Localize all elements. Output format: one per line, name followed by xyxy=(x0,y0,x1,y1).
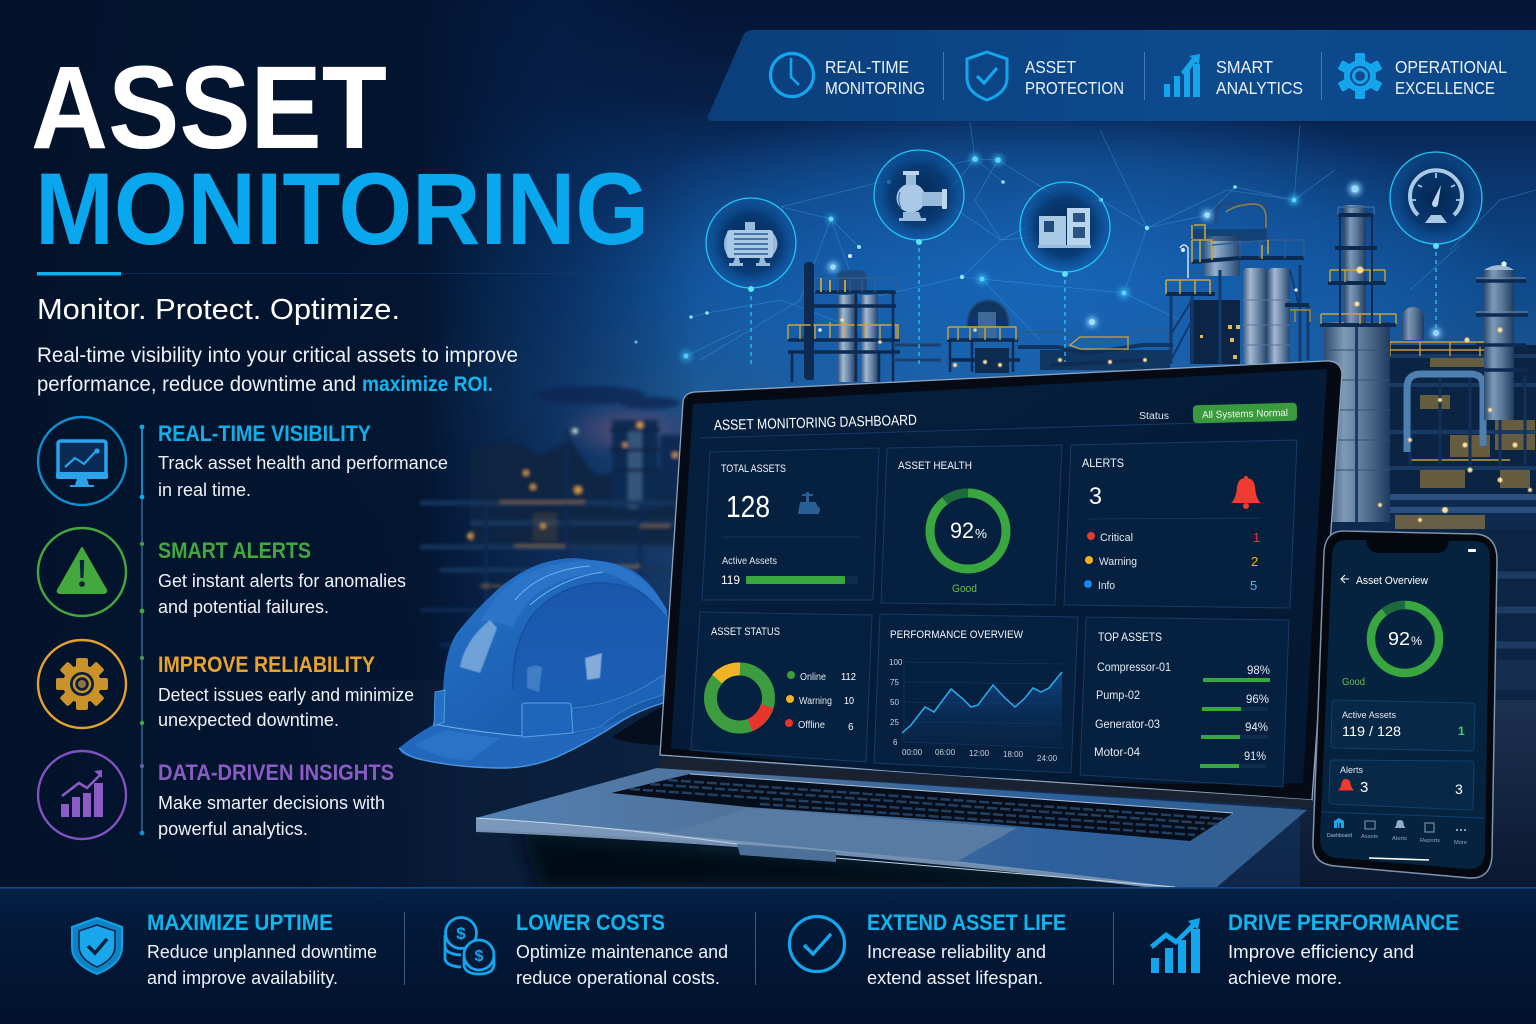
donut chart xyxy=(710,669,768,727)
icon: monitor with trend xyxy=(38,417,126,505)
icon bubble: generator xyxy=(1020,182,1110,362)
panel: alerts: ALERTS xyxy=(1082,458,1124,470)
small dome xyxy=(1402,307,1424,340)
line chart xyxy=(889,658,1063,763)
benefit: extend asset life: EXTEND ASSET LIFE xyxy=(867,910,1066,935)
column pair xyxy=(1243,268,1267,364)
panel: asset status: Online xyxy=(800,672,826,683)
panel: performance overview: PERFORMANCE OVERVIEW xyxy=(890,629,1024,641)
panel: alerts: Warning xyxy=(1099,556,1137,568)
top banner xyxy=(708,30,1536,121)
feature: data-driven insights: DATA-DRIVEN INSIGHTS xyxy=(158,760,394,785)
phone xyxy=(1313,531,1497,878)
feature: data-driven insights: Make smarter decisions with xyxy=(158,792,385,813)
feature: real-time visibility: REAL-TIME VISIBILITY xyxy=(158,421,371,446)
feature: smart alerts: Get instant alerts for anomalies xyxy=(158,570,406,591)
panel: asset status: Warning xyxy=(799,696,832,707)
label: real-time monitoring: REAL-TIME xyxy=(825,57,909,77)
status pill: All Systems Normal xyxy=(1202,408,1288,421)
panel: alerts xyxy=(1064,440,1297,608)
panel: top assets: 98% xyxy=(1247,665,1270,677)
icon: growth chart xyxy=(1150,918,1200,973)
label: real-time monitoring xyxy=(825,57,925,98)
benefit: extend asset life: Increase reliability and xyxy=(867,941,1046,962)
refinery: tower C xyxy=(1166,204,1310,364)
line chart: 24:00 xyxy=(1037,754,1058,763)
warm windows xyxy=(1395,355,1535,529)
large pipe arc xyxy=(1407,374,1483,452)
panel: asset status: Offline xyxy=(798,720,825,731)
ridge xyxy=(480,560,667,627)
intro paragraph: Real-time visibility into your critical assets to improve xyxy=(37,344,518,367)
feature: improve reliability: Detect issues early and minimize xyxy=(158,684,414,705)
panel: top assets: 94% xyxy=(1245,722,1268,734)
panel: total assets: Active Assets xyxy=(722,556,777,567)
benefit: drive performance: Improve efficiency and xyxy=(1228,941,1414,962)
icon: valve xyxy=(798,492,820,514)
panel: asset health: % xyxy=(975,526,987,541)
benefit: maximize uptime: Reduce unplanned downtime xyxy=(147,941,377,962)
label: real-time monitoring: MONITORING xyxy=(825,78,925,98)
feature: data-driven insights xyxy=(38,751,394,839)
benefit: maximize uptime: MAXIMIZE UPTIME xyxy=(147,910,333,935)
status pill xyxy=(1193,403,1297,423)
highlights xyxy=(460,620,497,673)
buckle xyxy=(522,703,573,737)
title: ASSET xyxy=(31,42,387,174)
title: MONITORING xyxy=(35,152,649,266)
panel: asset health: ASSET HEALTH xyxy=(898,460,972,472)
panel: asset status: 112 xyxy=(841,672,856,683)
icon bubble: pump xyxy=(874,150,964,365)
panel: total assets xyxy=(702,448,879,600)
feature: smart alerts: SMART ALERTS xyxy=(158,538,311,563)
panel: alerts: Info xyxy=(1098,580,1115,592)
dashboard title: ASSET MONITORING DASHBOARD xyxy=(714,413,917,434)
benefit: lower costs: Optimize maintenance and xyxy=(516,941,728,962)
panel: asset health: 92 xyxy=(950,518,974,543)
label: operational excellence: EXCELLENCE xyxy=(1395,78,1495,98)
icon: bars with trend xyxy=(38,751,126,839)
strap xyxy=(572,675,663,733)
panel: asset health xyxy=(881,445,1062,605)
bottom benefits band xyxy=(0,887,1536,1024)
panel: alerts: 2 xyxy=(1251,554,1258,569)
side clip xyxy=(434,690,445,726)
benefit: lower costs: LOWER COSTS xyxy=(516,910,665,935)
laptop deck xyxy=(476,768,1307,890)
panel: top assets: 96% xyxy=(1246,694,1269,706)
line chart: 06:00 xyxy=(935,748,956,757)
dome panel xyxy=(513,583,668,704)
benefit: drive performance xyxy=(1150,910,1459,988)
pipe bridge xyxy=(893,345,941,360)
icon: check circle xyxy=(790,916,844,972)
panel: asset status xyxy=(691,612,872,762)
line chart: 50 xyxy=(890,698,899,707)
label: asset protection xyxy=(1025,57,1124,98)
phone screen xyxy=(1320,540,1490,869)
line chart: 100 xyxy=(889,658,903,667)
lower structure xyxy=(1190,300,1240,364)
laptop xyxy=(476,361,1342,890)
line chart: 25 xyxy=(890,718,899,727)
benefit: drive performance: achieve more. xyxy=(1228,967,1342,988)
icon: clock xyxy=(770,54,814,96)
under-brim shadow xyxy=(612,706,664,745)
panel: top assets: Generator-03 xyxy=(1095,719,1160,731)
yellow rails xyxy=(1166,225,1212,294)
panel: total assets: TOTAL ASSETS xyxy=(721,463,786,475)
icon: coins xyxy=(445,918,494,974)
right decks and rails xyxy=(1390,356,1536,468)
title underline xyxy=(37,272,601,276)
left dark overlay xyxy=(0,0,700,890)
phone nav bar: Dashboard xyxy=(1327,833,1352,839)
title xyxy=(31,42,649,266)
phone card: alerts: 3 xyxy=(1455,781,1463,797)
feature: data-driven insights: powerful analytics. xyxy=(158,818,308,839)
panel: asset status: 10 xyxy=(844,696,854,707)
icon: coins: $ xyxy=(456,924,466,943)
feature: smart alerts: and potential failures. xyxy=(158,596,329,617)
blurred plant on left xyxy=(420,420,690,680)
panel: alerts: Critical xyxy=(1100,532,1133,544)
icon: gear xyxy=(38,640,126,728)
panel: top assets: Compressor-01 xyxy=(1097,662,1171,674)
benefit: drive performance: DRIVE PERFORMANCE xyxy=(1228,910,1459,935)
decks xyxy=(1192,258,1304,262)
icon: gear xyxy=(1338,53,1382,99)
icon: shield xyxy=(967,52,1007,100)
refinery: tower A xyxy=(788,262,941,382)
hard hat xyxy=(399,558,668,768)
panel: top assets: Pump-02 xyxy=(1096,690,1140,702)
phone card: active assets: Active Assets xyxy=(1342,710,1396,721)
line chart: 75 xyxy=(890,678,899,687)
phone card: active assets: 119 / 128 xyxy=(1342,723,1401,739)
phone card: active assets xyxy=(1331,700,1475,751)
panel: top assets: TOP ASSETS xyxy=(1098,632,1162,644)
intro paragraph: maximize ROI. xyxy=(362,373,493,396)
line chart: 18:00 xyxy=(1003,750,1024,759)
label: smart analytics: ANALYTICS xyxy=(1216,78,1303,98)
refinery: right plant mass xyxy=(1300,205,1536,700)
benefit: maximize uptime xyxy=(72,910,377,988)
walkway xyxy=(1018,330,1168,360)
feature: real-time visibility: in real time. xyxy=(158,479,251,500)
panel: asset health: Good xyxy=(952,583,977,595)
tagline: Monitor. Protect. Optimize. xyxy=(37,294,400,326)
tabletop right xyxy=(1300,700,1536,890)
phone gauge: % xyxy=(1411,634,1422,648)
benefit: maximize uptime: and improve availability. xyxy=(147,967,338,988)
tower D column xyxy=(1324,322,1390,522)
benefit: lower costs xyxy=(445,910,728,988)
panel: total assets: 119 xyxy=(721,573,740,587)
phone nav bar: Reports xyxy=(1420,838,1440,844)
phone header: Asset Overview xyxy=(1356,575,1428,587)
panel: alerts: 1 xyxy=(1253,530,1260,545)
phone gauge: 92 xyxy=(1388,628,1410,649)
label: smart analytics xyxy=(1216,57,1303,98)
feature: improve reliability: unexpected downtime. xyxy=(158,709,339,730)
phone card: alerts xyxy=(1329,760,1474,810)
network nodes xyxy=(634,156,1296,358)
phone: Good xyxy=(1342,676,1365,688)
label: smart analytics: SMART xyxy=(1216,57,1273,77)
phone nav bar: Alerts xyxy=(1392,836,1407,842)
phone card: alerts: Alerts xyxy=(1340,765,1363,776)
feature: real-time visibility: Track asset health and performance xyxy=(158,452,448,473)
upper vessel and pipework xyxy=(1204,236,1240,276)
line chart: 6 xyxy=(893,738,898,747)
benefit: extend asset life xyxy=(790,910,1066,988)
timeline spine xyxy=(140,425,144,835)
icon: coins: $ xyxy=(475,948,484,965)
tower E xyxy=(1484,270,1514,420)
phone nav bar: Assets xyxy=(1361,834,1378,840)
dusk glow xyxy=(555,398,705,462)
panel: alerts: 5 xyxy=(1250,578,1257,593)
network lines in sky xyxy=(686,122,1536,360)
tabletop left xyxy=(300,680,700,890)
line chart: 00:00 xyxy=(902,748,923,757)
label: operational excellence xyxy=(1395,57,1507,98)
benefit: extend asset life: extend asset lifespan. xyxy=(867,967,1043,988)
laptop lid xyxy=(660,361,1342,800)
panel: performance overview xyxy=(874,614,1078,773)
brim xyxy=(399,703,663,768)
phone nav bar xyxy=(1321,812,1484,860)
panel: asset status: ASSET STATUS xyxy=(711,626,780,638)
phone gauge xyxy=(1371,605,1439,673)
refinery: tower B and walkways xyxy=(947,300,1173,373)
label: asset protection: ASSET xyxy=(1025,57,1076,77)
phone nav bar: More xyxy=(1454,840,1467,846)
clouds xyxy=(535,386,680,409)
phone card: alerts: 3 xyxy=(1360,779,1368,796)
panel: alerts: 3 xyxy=(1089,483,1102,510)
panel: top assets: Motor-04 xyxy=(1094,747,1141,759)
feature: smart alerts xyxy=(38,528,406,617)
intro paragraph: performance, reduce downtime and xyxy=(37,373,356,396)
feature: improve reliability xyxy=(38,640,414,730)
icon: shield xyxy=(72,918,122,974)
laptop screen xyxy=(671,369,1327,787)
feature: improve reliability: IMPROVE RELIABILITY xyxy=(158,652,375,677)
status label: Status xyxy=(1139,411,1169,422)
icon: red bell xyxy=(1231,476,1261,509)
icon bubble: motor xyxy=(706,198,796,368)
phone card: active assets: 1 xyxy=(1458,724,1465,738)
icon bubble: gauge xyxy=(1390,152,1482,334)
icon: warning triangle xyxy=(38,528,126,616)
feature: real-time visibility xyxy=(38,417,448,505)
panel: asset status: 6 xyxy=(848,722,854,733)
benefit: lower costs: reduce operational costs. xyxy=(516,967,720,988)
panel: total assets: 128 xyxy=(726,489,770,524)
site lights xyxy=(818,183,1532,522)
label: operational excellence: OPERATIONAL xyxy=(1395,57,1507,77)
label: asset protection: PROTECTION xyxy=(1025,78,1124,98)
icon: bars xyxy=(1164,54,1200,97)
panel: top assets xyxy=(1080,617,1289,787)
panel: top assets: 91% xyxy=(1244,751,1266,763)
intro paragraph xyxy=(37,344,518,396)
line chart: 12:00 xyxy=(969,749,990,758)
